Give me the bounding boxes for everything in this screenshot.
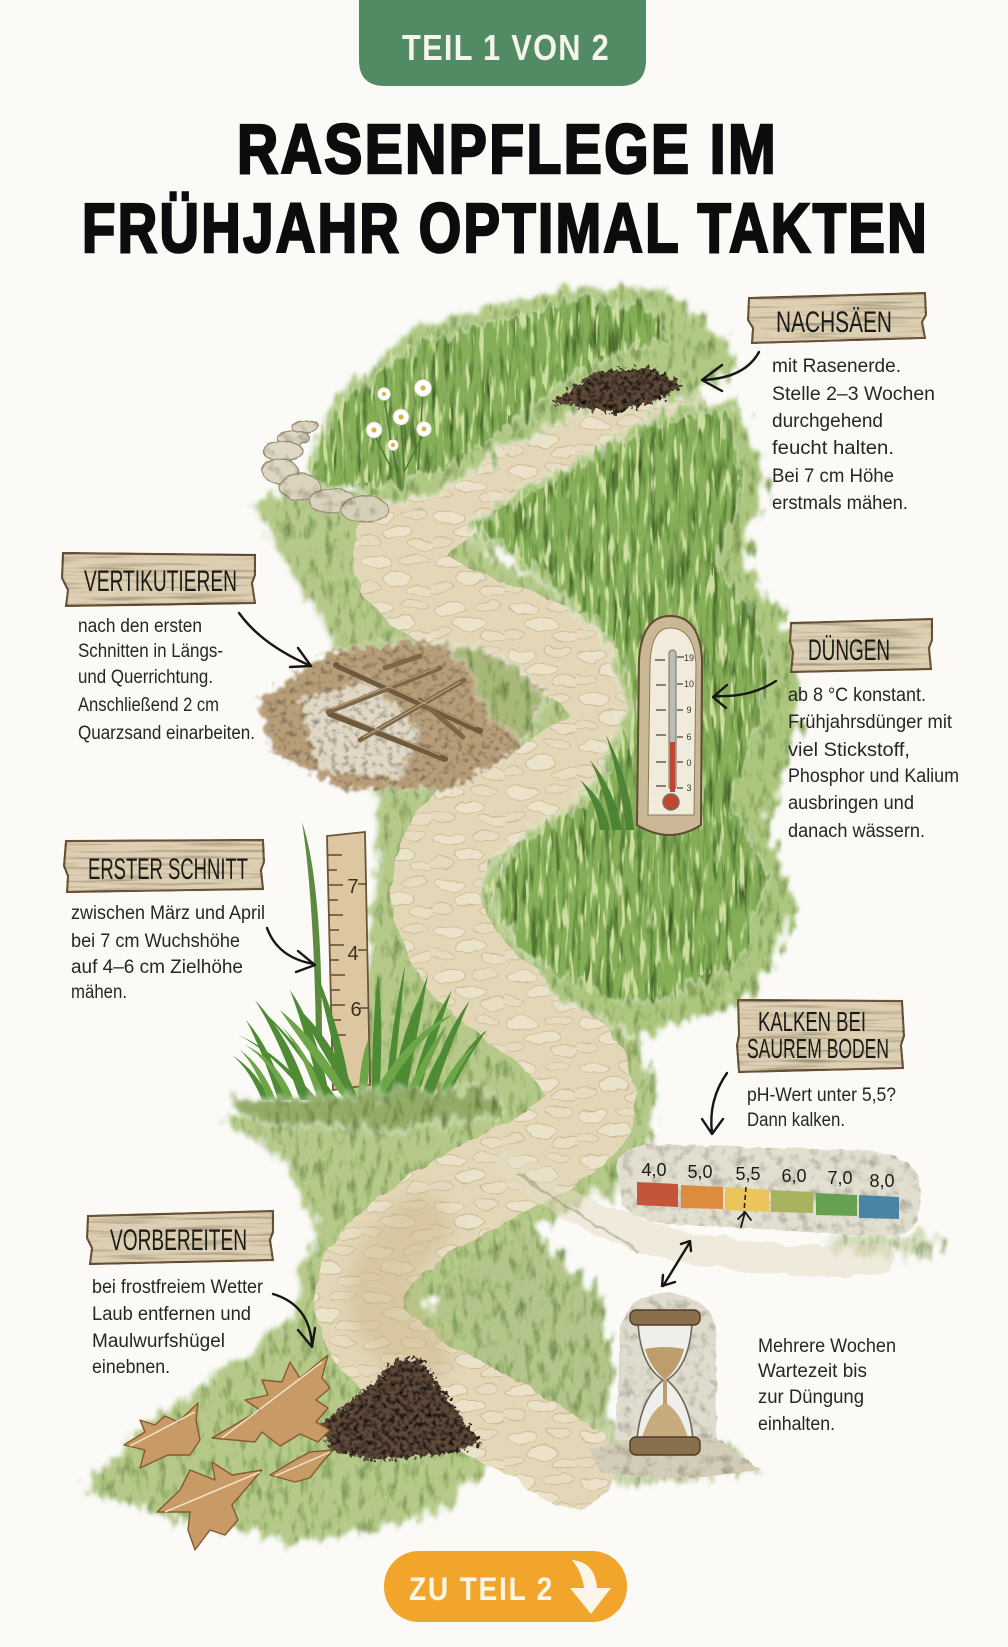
- sign: SAUREM BODEN: [747, 1033, 889, 1064]
- text: einebnen.: [92, 1357, 170, 1378]
- hourglass stone: [590, 1293, 760, 1478]
- pH colour scale: 8,0: [869, 1171, 895, 1191]
- text: feucht halten.: [772, 438, 894, 459]
- pH colour scale: 5,0: [687, 1162, 713, 1182]
- ruler post: 4: [347, 943, 359, 965]
- text: ab 8 °C konstant.: [788, 685, 926, 706]
- text: [92, 1277, 264, 1378]
- text: Laub entfernen und: [92, 1304, 251, 1325]
- grass backing along the path: [359, 404, 640, 1370]
- top lawn light blades: [310, 300, 668, 490]
- note: waiting time: zur Düngung: [758, 1387, 864, 1408]
- sign: [748, 293, 926, 343]
- note: waiting time: [758, 1336, 896, 1435]
- sign: [790, 619, 932, 672]
- scarified soil patch: [258, 640, 548, 790]
- text: ausbringen und: [788, 793, 914, 814]
- text: Schnitten in Längs-: [78, 641, 223, 662]
- walking path: [359, 404, 880, 1465]
- step: Nachsäen: [702, 293, 935, 514]
- note: waiting time: einhalten.: [758, 1414, 835, 1435]
- top lawn dense grass: [310, 300, 668, 490]
- thermometer: 0: [686, 758, 692, 768]
- thermometer: 19: [684, 653, 694, 663]
- text: Quarzsand einarbeiten.: [78, 723, 255, 744]
- darker sandy section of the path: [379, 1225, 420, 1355]
- title: [82, 110, 929, 267]
- text: Maulwurfshügel: [92, 1331, 225, 1352]
- text: zwischen März und April: [71, 903, 265, 924]
- step: Erster Schnitt: [64, 840, 315, 1003]
- note: waiting time: Wartezeit bis: [758, 1361, 867, 1382]
- pH colour scale: 7,0: [827, 1168, 853, 1188]
- grass tuft with ruler: [225, 822, 505, 1130]
- pH colour scale: 4,0: [641, 1160, 667, 1180]
- text: [78, 616, 255, 744]
- sign: NACHSÄEN: [776, 306, 892, 339]
- sign: [87, 1211, 273, 1264]
- text: erstmals mähen.: [772, 493, 908, 514]
- text: Bei 7 cm Höhe: [772, 466, 894, 487]
- ruler post: 6: [350, 999, 362, 1021]
- sign: VERTIKUTIEREN: [84, 565, 237, 598]
- text: nach den ersten: [78, 616, 202, 637]
- icon: scarifying sticks: [328, 656, 480, 759]
- icon: bare soil patch for reseeding: [552, 368, 686, 414]
- text: bei 7 cm Wuchshöhe: [71, 931, 240, 952]
- sign: DÜNGEN: [808, 634, 890, 667]
- step: Kalken bei saurem Boden: [702, 1000, 904, 1134]
- right lawn dense grass: [475, 410, 770, 1000]
- thermometer: [580, 616, 702, 835]
- text: [747, 1085, 896, 1131]
- step: Düngen: [713, 619, 959, 842]
- note: waiting time: Mehrere Wochen: [758, 1336, 896, 1357]
- title: RASENPFLEGE IM: [237, 110, 778, 188]
- text: viel Stickstoff,: [788, 740, 910, 761]
- tab: part label: [359, 0, 646, 86]
- text: Phosphor und Kalium: [788, 766, 959, 787]
- hourglass: [630, 1310, 700, 1455]
- text: mit Rasenerde.: [772, 356, 901, 377]
- text: mähen.: [71, 982, 127, 1003]
- pH stone: [617, 1144, 921, 1236]
- text: auf 4–6 cm Zielhöhe: [71, 957, 243, 978]
- arrow: [713, 681, 776, 708]
- sign: [64, 840, 264, 892]
- text: pH-Wert unter 5,5?: [747, 1085, 896, 1106]
- arrow: [273, 1294, 315, 1347]
- grass at base: [580, 735, 634, 830]
- sign: [62, 553, 255, 606]
- border stones: [262, 421, 389, 522]
- text: Frühjahrsdünger mit: [788, 712, 953, 733]
- icon: daisies: [366, 380, 432, 475]
- icon: dry leaves: [124, 1355, 333, 1550]
- text: und Querrichtung.: [78, 667, 213, 688]
- grass blades: [232, 965, 487, 1100]
- illustration: winding garden path landscape: [80, 283, 950, 1550]
- sign: ERSTER SCHNITT: [88, 853, 248, 886]
- text: Dann kalken.: [747, 1110, 845, 1131]
- right lawn light blades: [475, 410, 770, 1000]
- step: Vertikutieren: [62, 553, 311, 744]
- text: durchgehend: [772, 411, 883, 432]
- text: Anschließend 2 cm: [78, 695, 219, 716]
- right lawn wash: [460, 400, 800, 1040]
- ruler post: 7: [347, 876, 359, 898]
- sign: VORBEREITEN: [110, 1224, 247, 1257]
- pale grass washes: [80, 404, 950, 1545]
- text: Stelle 2–3 Wochen: [772, 384, 935, 405]
- molehill: [320, 1358, 482, 1460]
- button: to part 2: [384, 1551, 627, 1622]
- tab: part label: TEIL 1 VON 2: [402, 27, 610, 68]
- ground below the tuft: [225, 1088, 505, 1130]
- top lawn wash: [305, 283, 742, 505]
- text: danach wässern.: [788, 821, 925, 842]
- thermometer: 9: [686, 705, 692, 715]
- thermometer: 3: [686, 783, 692, 793]
- pH colour scale: 5,5: [735, 1164, 761, 1184]
- step: Vorbereiten: [87, 1211, 315, 1378]
- pH colour scale: 6,0: [781, 1166, 807, 1186]
- marker arrow: [738, 1212, 751, 1227]
- double arrow: pH stone to hourglass: [662, 1241, 691, 1286]
- arrow: [267, 928, 315, 972]
- button: to part 2: ZU TEIL 2: [409, 1571, 554, 1607]
- text: [788, 685, 959, 842]
- arrow: [239, 613, 311, 667]
- sign: KALKEN BEI: [758, 1006, 866, 1037]
- pH colour scale: [637, 1160, 899, 1219]
- icon: arrow: [570, 1560, 611, 1614]
- arrow: [702, 1073, 727, 1134]
- thermometer: 10: [684, 679, 694, 689]
- ruler post: [327, 832, 370, 1090]
- text: [772, 356, 935, 514]
- thermometer: 6: [686, 732, 692, 742]
- text: [71, 903, 265, 1003]
- text: bei frostfreiem Wetter: [92, 1277, 264, 1298]
- tall grass blade: [302, 822, 322, 1040]
- arrow: [702, 352, 759, 391]
- sign: [737, 1000, 904, 1072]
